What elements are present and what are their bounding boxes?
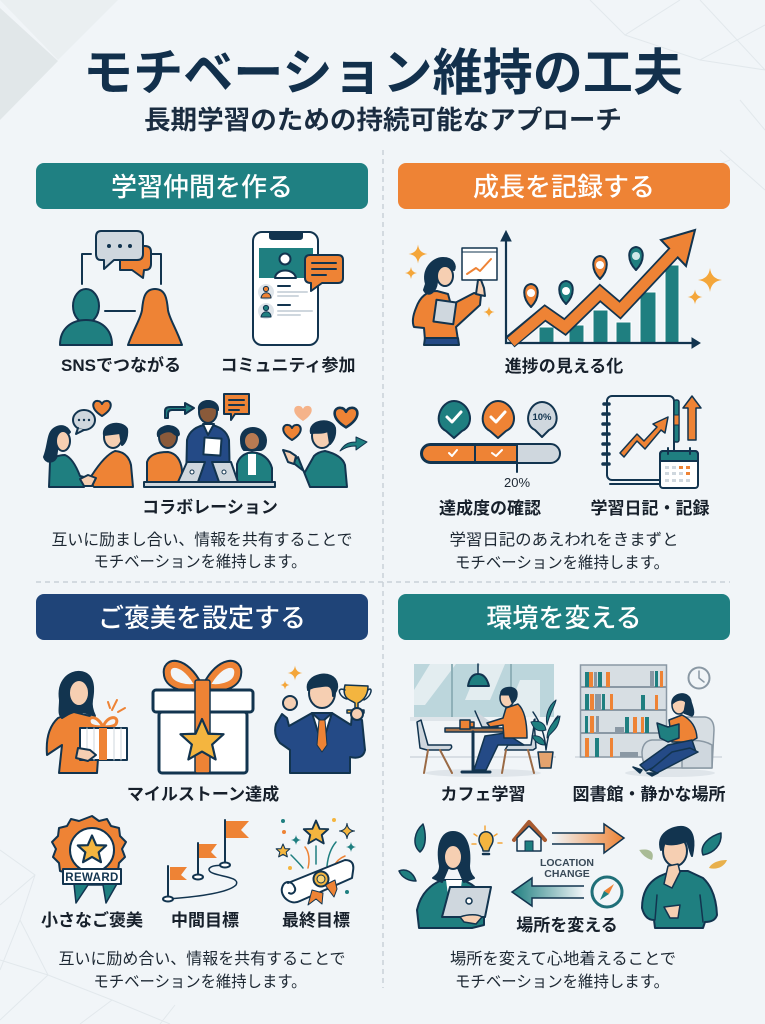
title: モチベーション維持の工夫 (83, 45, 683, 101)
label: 図書館・静かな場所 (572, 784, 726, 804)
label: カフェ学習 (440, 784, 526, 804)
icon: study journal (603, 396, 701, 488)
label: コラボレーション (142, 498, 278, 517)
label: 学習日記・記録 (590, 498, 710, 518)
panel: rewards (36, 594, 371, 991)
illustration: woman with gift (47, 672, 127, 773)
description line 2: モチベーションを維持します。 (94, 973, 306, 991)
heading: change environment (398, 594, 730, 640)
icon: compass (592, 877, 622, 907)
icon: phone community (253, 232, 343, 345)
description line 2: モチベーションを維持します。 (455, 973, 669, 991)
label: 場所を変える (516, 916, 618, 935)
description: 互いに励まし合い、情報を共有することで (52, 531, 352, 549)
description: 学習日記のあえわれをきまずと (450, 531, 678, 549)
panel: record growth (398, 163, 730, 572)
icon: reward badge: REWARD (65, 872, 119, 884)
arrow: to the right (552, 824, 624, 853)
label: 中間目標 (171, 911, 239, 930)
chart: rising progress (501, 230, 700, 348)
description line 2: モチベーションを維持します。 (455, 554, 669, 572)
icon: social network (60, 231, 182, 345)
description line 2: モチベーションを維持します。 (94, 553, 306, 571)
text: location change (540, 857, 594, 880)
label: マイルストーン達成 (127, 784, 279, 804)
heading: record growth (398, 163, 730, 209)
panel: learning peers (36, 163, 368, 571)
illustration: presenter (413, 248, 497, 345)
label: SNSでつながる (61, 355, 181, 375)
panel: change environment (398, 594, 730, 991)
label: 最終目標 (282, 911, 350, 930)
icon: house (514, 822, 545, 851)
heading: learning peers (36, 163, 368, 209)
illustration: collaboration (44, 394, 367, 487)
label: 進捗の見える化 (505, 357, 623, 376)
heading: record growth: 成長を記録する (473, 172, 655, 202)
icons: sparkles (405, 244, 722, 318)
illustration: cafe study (410, 664, 560, 777)
label: 達成度の確認 (439, 498, 541, 518)
icon: big gift box (153, 665, 253, 773)
description: 互いに励め合い、情報を共有することで (58, 950, 346, 968)
icon: achievement progress: 10% (532, 412, 552, 423)
text: location change: CHANGE (544, 868, 590, 880)
arrow: to the left (512, 878, 584, 906)
illustration: woman on laptop (399, 824, 502, 928)
subtitle: 長期学習のための持続可能なアプローチ (144, 105, 622, 135)
text: location change: LOCATION (540, 857, 594, 869)
icon: achievement progress (421, 401, 560, 490)
icons: sparkles (280, 666, 302, 690)
icon: reward badge (52, 816, 126, 903)
illustration: thinking man (639, 827, 727, 928)
label: 小さなご褒美 (41, 910, 143, 930)
heading: learning peers: 学習仲間を作る (111, 172, 293, 202)
heading: change environment: 環境を変える (486, 603, 642, 633)
illustration: library (575, 665, 722, 777)
heading: rewards (36, 594, 368, 640)
heading: rewards: ご褒美を設定する (98, 603, 306, 633)
icon: milestone flags (163, 820, 249, 902)
description: 場所を変えて心地着えることで (450, 950, 676, 968)
label: コミュニティ参加 (221, 356, 355, 375)
icon: achievement progress: 20% (504, 475, 530, 490)
icon: diploma and confetti (276, 818, 356, 905)
illustration: man with trophy (275, 675, 371, 773)
